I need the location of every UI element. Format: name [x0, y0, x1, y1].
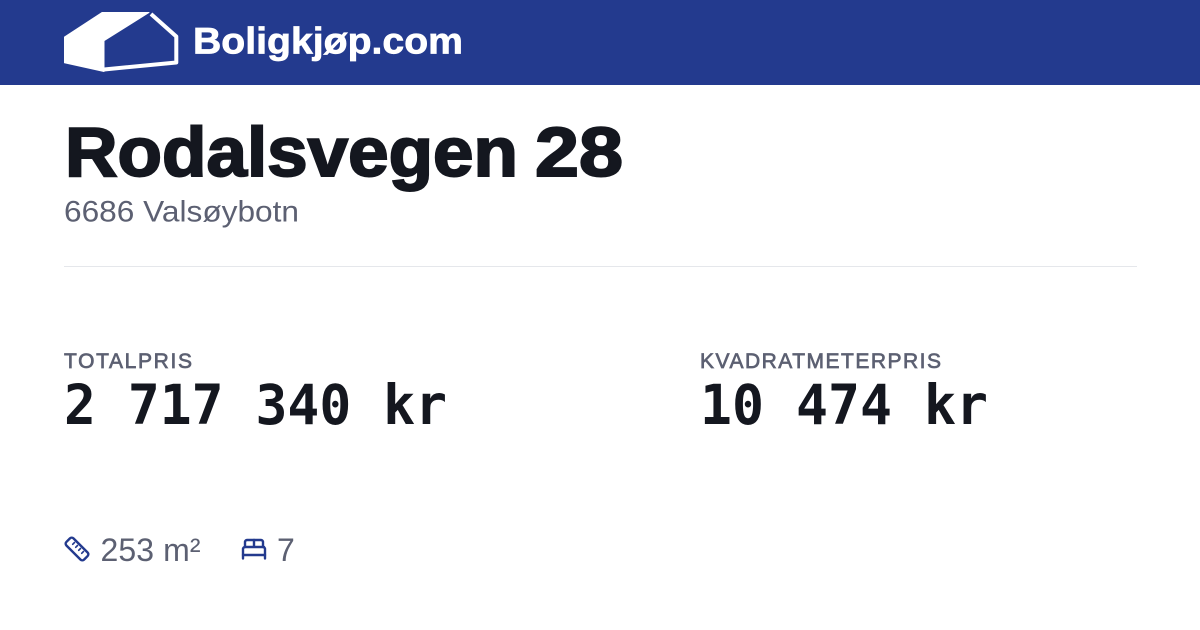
subtitle: postal place: 6686 Valsøybotn	[64, 196, 299, 228]
stat: price per square metre: 10 474 kr	[700, 373, 988, 437]
title: address: 28	[535, 113, 623, 191]
icon: house logo	[64, 12, 176, 72]
icon: bed	[243, 540, 265, 558]
stat: total price: 2 717 340 kr	[64, 373, 447, 437]
stat: price per square metre: KVADRATMETERPRIS	[700, 350, 941, 373]
header bar	[0, 0, 1200, 85]
area value: 253 m²	[100, 532, 201, 568]
bedrooms value: 7	[277, 532, 295, 568]
stat: total price: TOTALPRIS	[64, 350, 192, 373]
title: address: Rodalsvegen	[65, 113, 518, 191]
brand name: Boligkjøp.com	[193, 20, 463, 62]
icon: ruler	[65, 537, 89, 561]
